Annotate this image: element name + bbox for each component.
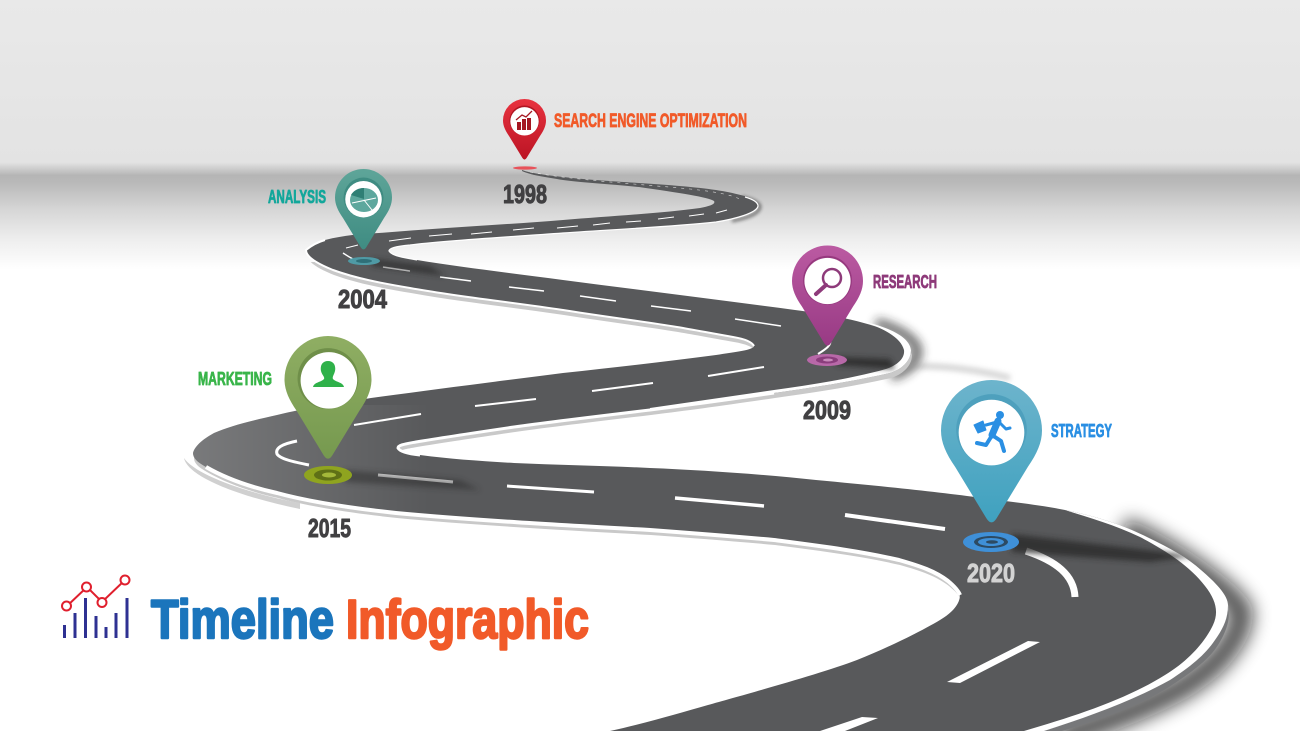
pin body	[792, 246, 863, 346]
title word: Infographic: Infographic	[346, 588, 589, 650]
road cast shadow, right bend	[1057, 529, 1241, 731]
white road edge: left bend	[306, 240, 754, 346]
pin body	[284, 336, 372, 459]
dashes: third stretch	[383, 267, 781, 326]
pin shadows on the road	[345, 259, 1195, 562]
dash: lower right	[947, 641, 1040, 683]
left bend highlight	[193, 405, 369, 508]
year: 2015	[308, 513, 351, 543]
white road edge: inner fold	[398, 393, 774, 455]
label: RESEARCH	[873, 272, 937, 292]
road cast shadow, top bend	[732, 197, 760, 221]
logo trend line	[62, 576, 130, 610]
logo bars	[64, 598, 127, 638]
white road edges: far sections	[389, 197, 758, 260]
road side thickness	[194, 262, 1229, 615]
dashes: far stretch	[530, 172, 742, 201]
road: winding highway	[184, 170, 1241, 731]
dash: bottom edge	[820, 717, 878, 731]
icon: magnifying glass	[816, 269, 841, 294]
pin body	[335, 169, 392, 249]
icon: bar chart with arrow	[516, 111, 532, 130]
white road edge: middle bend	[650, 320, 911, 410]
white road edge: lower long section	[206, 467, 960, 595]
year: 2009	[803, 395, 851, 425]
dash: before strategy pin	[845, 515, 945, 529]
dashes: short curve beneath research pin	[818, 340, 830, 354]
year: 2004	[338, 284, 387, 314]
year: 2020	[967, 558, 1015, 588]
target marker	[807, 354, 847, 366]
shadow: strategy	[1012, 534, 1195, 562]
pin body	[503, 99, 546, 160]
dashes: curve near marketing pin	[277, 441, 309, 465]
title	[151, 588, 589, 650]
icon: person	[313, 361, 344, 387]
target marker	[348, 257, 380, 265]
white road edge: right bend	[1024, 510, 1228, 731]
road surface	[193, 170, 1228, 731]
shadow: research	[836, 357, 895, 369]
pin body	[941, 380, 1042, 522]
road cast shadow, middle bend	[876, 323, 917, 376]
milestone 2015: marketing	[198, 336, 372, 543]
label: SEARCH ENGINE OPTIMIZATION	[554, 111, 747, 132]
grey rim, left bend	[184, 458, 300, 509]
title word: Timeline: Timeline	[151, 588, 334, 650]
icon: pie chart	[350, 188, 378, 212]
dashes: fourth stretch	[354, 367, 764, 425]
shadow: analysis	[372, 259, 445, 276]
target marker	[513, 166, 537, 170]
target marker	[304, 466, 352, 484]
faint trailing shadow, middle bend	[895, 366, 1010, 378]
centre line dashes	[277, 172, 1075, 597]
year: 1998	[503, 179, 547, 209]
label: STRATEGY	[1051, 421, 1112, 441]
milestone 1998: search engine optimization	[503, 99, 747, 209]
label: ANALYSIS	[268, 187, 326, 207]
milestone 2004: analysis	[268, 169, 392, 314]
target marker	[963, 532, 1019, 552]
label: MARKETING	[198, 369, 272, 389]
icon: chart logo	[62, 576, 130, 638]
icon: running businessman	[974, 411, 1010, 451]
dashes: left curve near analysis pin	[343, 253, 353, 259]
milestone 2009: research	[792, 246, 937, 425]
dashes: second stretch	[346, 210, 727, 248]
dashes: fifth stretch near	[675, 498, 764, 506]
dashes: curve beside 2020	[1026, 551, 1075, 597]
dark side thickness, right bend	[1044, 605, 1229, 731]
shadow: marketing	[345, 470, 480, 490]
dashes: fifth stretch	[378, 475, 594, 492]
milestone 2020: strategy	[941, 380, 1112, 588]
